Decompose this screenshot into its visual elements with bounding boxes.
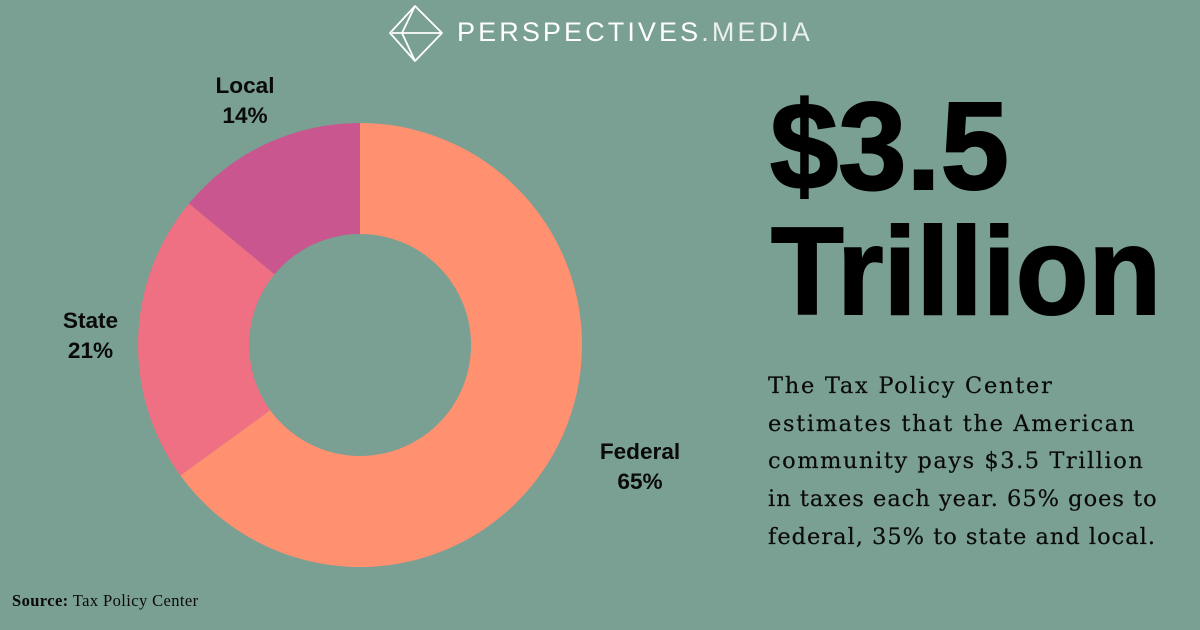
headline unit: Trillion	[771, 203, 1161, 341]
description text: The Tax Policy Center	[768, 373, 1054, 399]
label: Local: Local	[215, 73, 274, 98]
label: State: State	[63, 308, 118, 333]
label: Federal: 65%	[617, 469, 663, 494]
headline figure: $3.5	[770, 78, 1009, 216]
description text: community pays $3.5 Trillion	[768, 448, 1144, 474]
description text: in taxes each year. 65% goes to	[768, 486, 1158, 512]
label: Local: 14%	[222, 103, 268, 128]
logo wordmark: PERSPECTIVES.MEDIA	[457, 17, 813, 47]
label: Local	[215, 73, 274, 128]
segment: Local 14%	[189, 123, 360, 274]
donut chart	[138, 123, 582, 567]
label: State	[63, 308, 118, 363]
description text	[768, 373, 1158, 550]
description text: federal, 35% to state and local.	[768, 524, 1156, 550]
segment: Federal 65%	[180, 123, 582, 567]
label: Federal	[600, 439, 680, 494]
segment: State 21%	[138, 204, 274, 476]
logo	[389, 5, 813, 62]
icon: gem diamond	[389, 5, 443, 62]
label: Federal: Federal	[600, 439, 680, 464]
source note: Source: Tax Policy Center	[12, 591, 199, 610]
label: State: 21%	[68, 338, 113, 363]
description text: estimates that the American	[768, 411, 1136, 437]
